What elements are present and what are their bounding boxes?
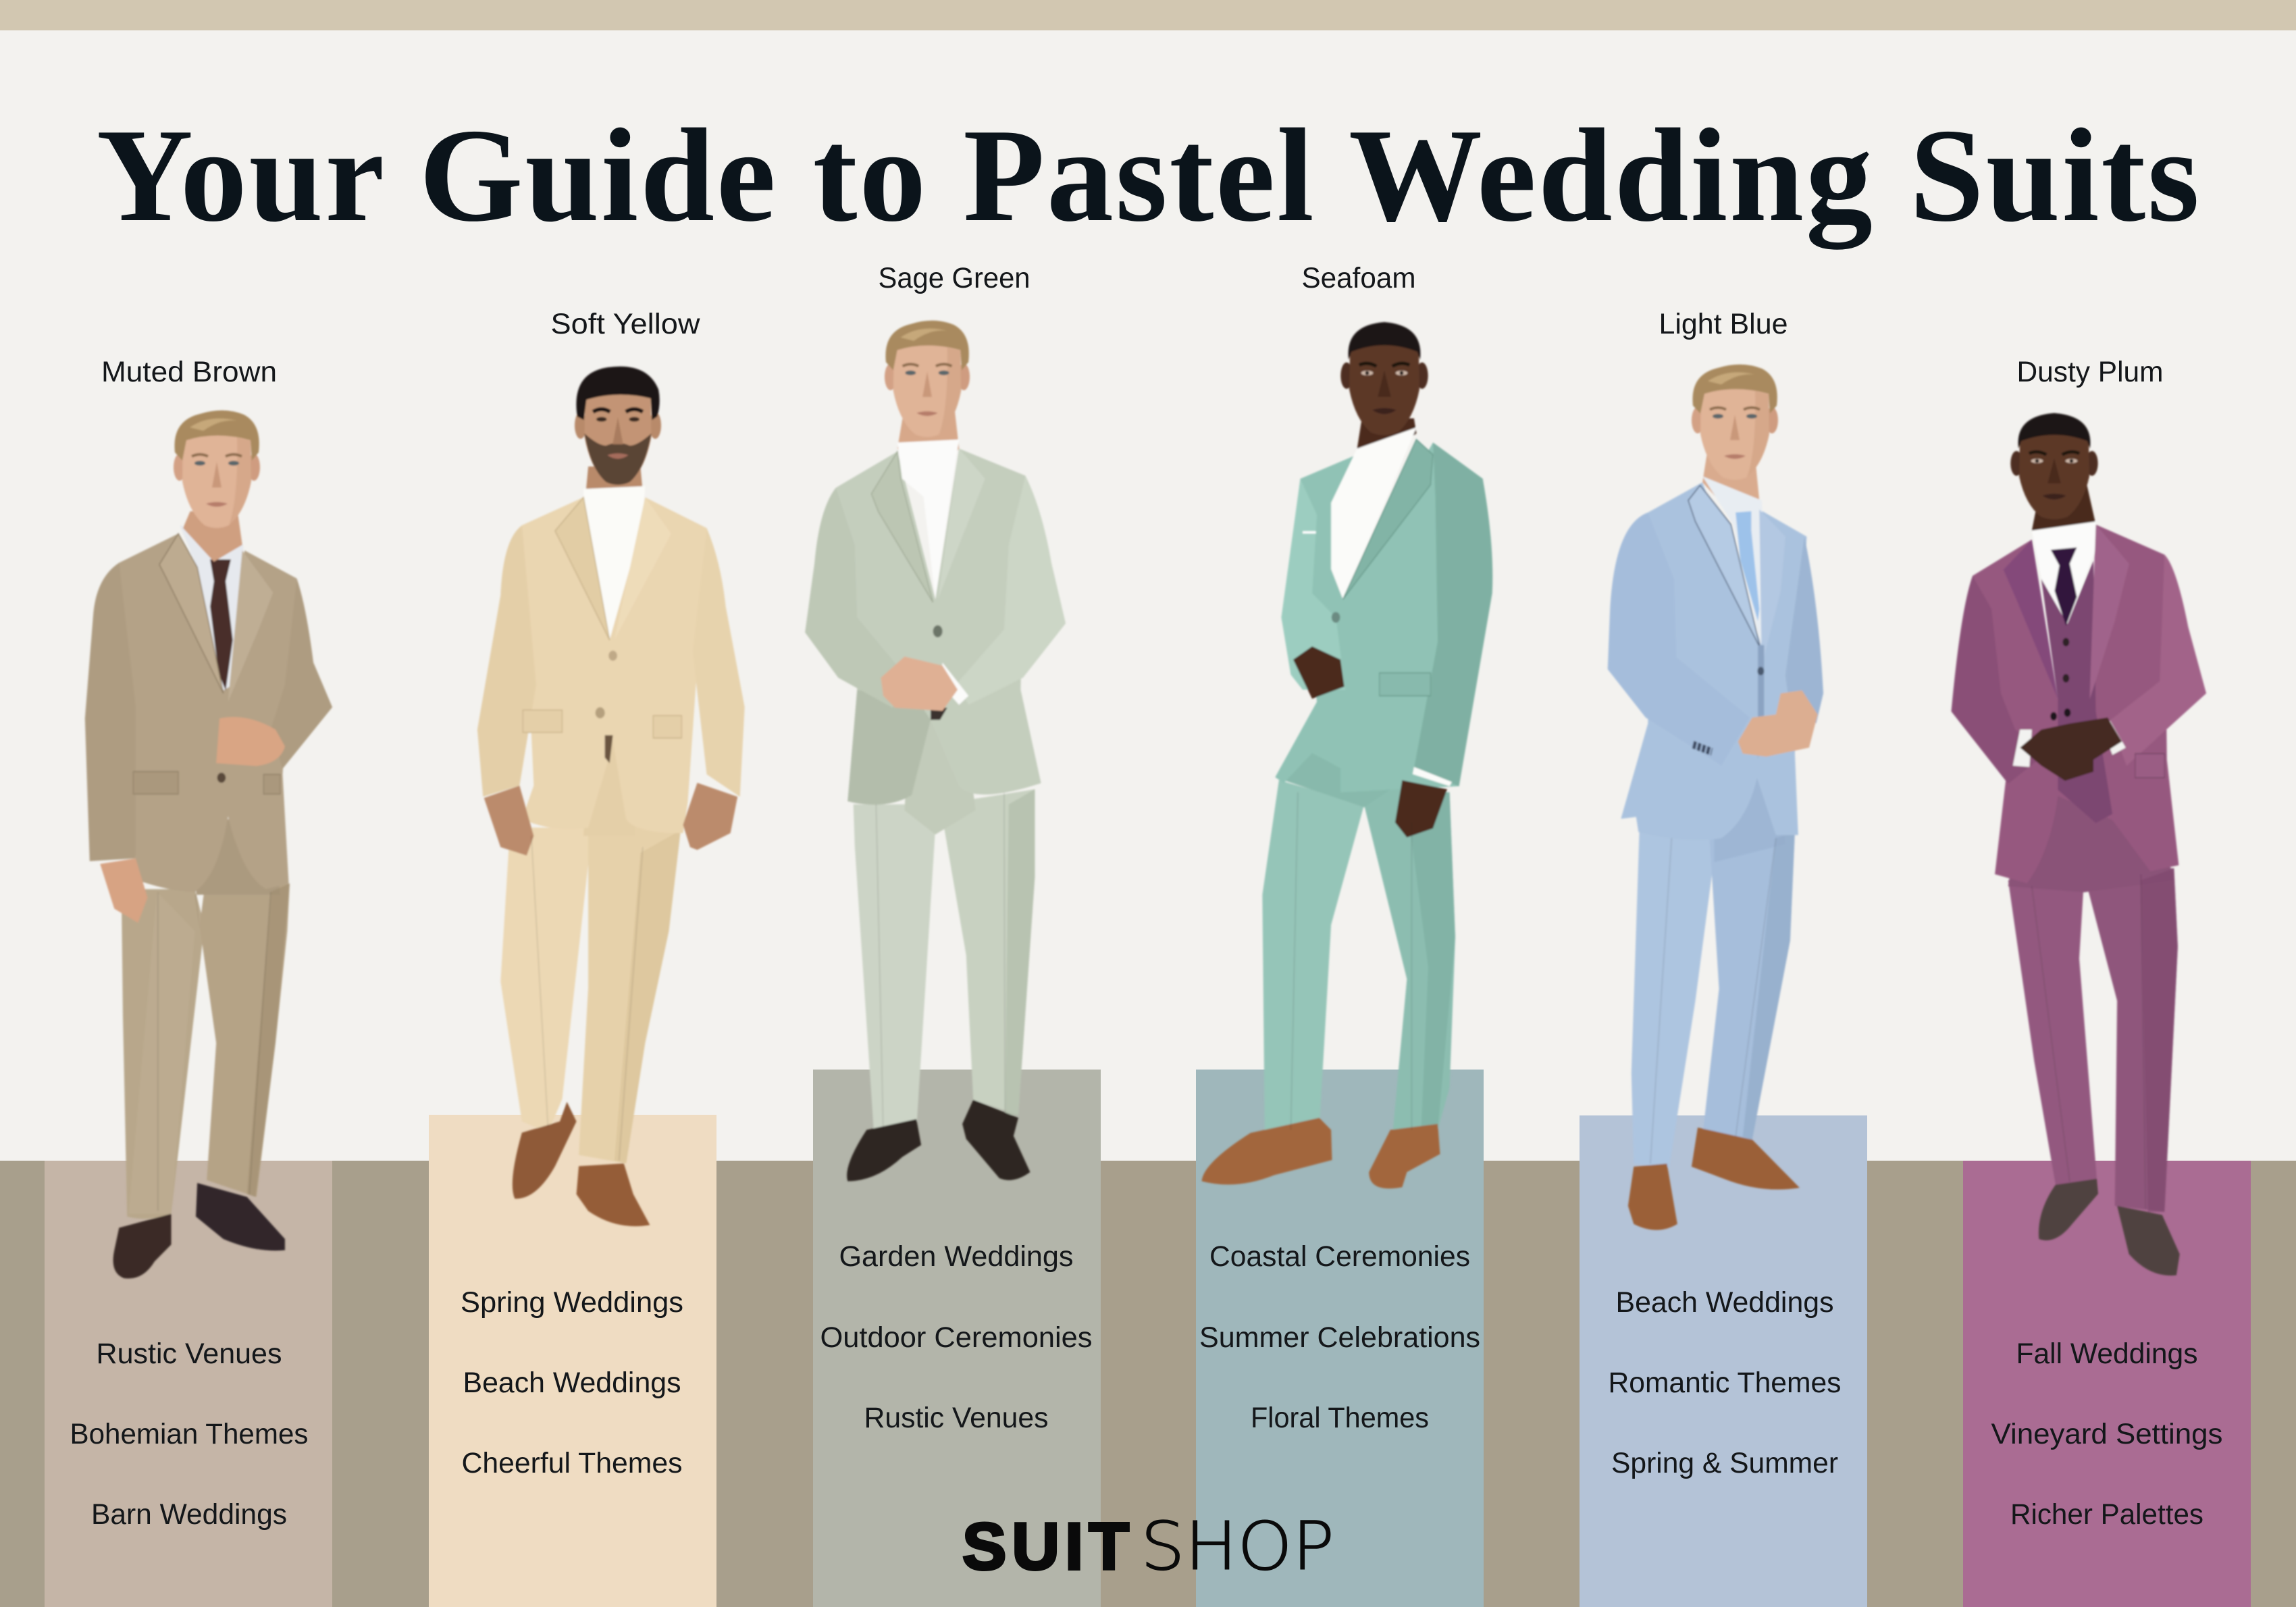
list: sage green occasions — [820, 1240, 1093, 1434]
list: dusty plum occasions: Richer Palettes — [2010, 1498, 2203, 1531]
label: seafoam: Seafoam — [1302, 262, 1415, 294]
list: dusty plum occasions — [1991, 1338, 2223, 1531]
figure: man in seafoam suit — [1202, 322, 1492, 1188]
panel: light blue — [1580, 308, 1867, 1607]
column: dusty plum — [1963, 1161, 2251, 1607]
list: soft yellow occasions: Cheerful Themes — [462, 1447, 682, 1479]
list: sage green occasions: Outdoor Ceremonies — [820, 1321, 1093, 1354]
list: seafoam occasions: Coastal Ceremonies — [1209, 1240, 1470, 1273]
label: soft yellow: Soft Yellow — [551, 308, 700, 340]
list: soft yellow occasions — [461, 1286, 683, 1479]
list: dusty plum occasions: Vineyard Settings — [1991, 1418, 2223, 1450]
label: sage green: Sage Green — [878, 262, 1030, 294]
list: soft yellow occasions: Spring Weddings — [461, 1286, 683, 1319]
figure: man in sage green suit — [805, 321, 1066, 1181]
logo: SuitShop: SHOP — [1141, 1508, 1334, 1585]
panel: seafoam — [1196, 262, 1492, 1607]
label: muted brown: Muted Brown — [101, 356, 277, 388]
panel: sage green — [805, 262, 1101, 1607]
top band — [0, 0, 2296, 30]
label: dusty plum: Dusty Plum — [2016, 356, 2164, 388]
logo: SuitShop — [962, 1508, 1334, 1585]
floor band — [0, 1161, 2296, 1607]
panel: soft yellow — [429, 308, 745, 1607]
column: soft yellow — [429, 1115, 716, 1607]
list: sage green occasions: Rustic Venues — [864, 1402, 1048, 1434]
figure: man in soft yellow suit — [477, 367, 745, 1226]
list: light blue occasions: Beach Weddings — [1615, 1286, 1834, 1319]
list: light blue occasions — [1609, 1286, 1841, 1479]
list: seafoam occasions: Summer Celebrations — [1199, 1321, 1480, 1354]
column: sage green — [813, 1070, 1101, 1607]
list: light blue occasions: Spring & Summer — [1611, 1447, 1838, 1479]
panel: muted brown — [45, 356, 332, 1607]
list: light blue occasions: Romantic Themes — [1609, 1367, 1841, 1399]
figure: man in dusty plum suit — [1952, 413, 2206, 1275]
list: seafoam occasions: Floral Themes — [1251, 1402, 1429, 1434]
list: muted brown occasions: Barn Weddings — [91, 1498, 287, 1531]
figure: man in muted brown suit — [85, 411, 332, 1278]
label: light blue: Light Blue — [1659, 308, 1788, 340]
list: soft yellow occasions: Beach Weddings — [463, 1367, 681, 1399]
panel: dusty plum — [1952, 356, 2251, 1607]
list: dusty plum occasions: Fall Weddings — [2016, 1338, 2197, 1370]
list: sage green occasions: Garden Weddings — [839, 1240, 1074, 1273]
figure: man in light blue suit — [1608, 365, 1823, 1230]
list: muted brown occasions — [70, 1338, 308, 1531]
column: light blue — [1580, 1115, 1867, 1607]
list: muted brown occasions: Bohemian Themes — [70, 1418, 308, 1450]
title: Your Guide to Pastel Wedding Suits — [97, 101, 2199, 250]
column: muted brown — [45, 1161, 332, 1607]
logo: SuitShop: SUIT — [962, 1509, 1129, 1583]
list: seafoam occasions — [1199, 1240, 1480, 1434]
column: seafoam — [1196, 1070, 1484, 1607]
list: muted brown occasions: Rustic Venues — [96, 1338, 282, 1370]
